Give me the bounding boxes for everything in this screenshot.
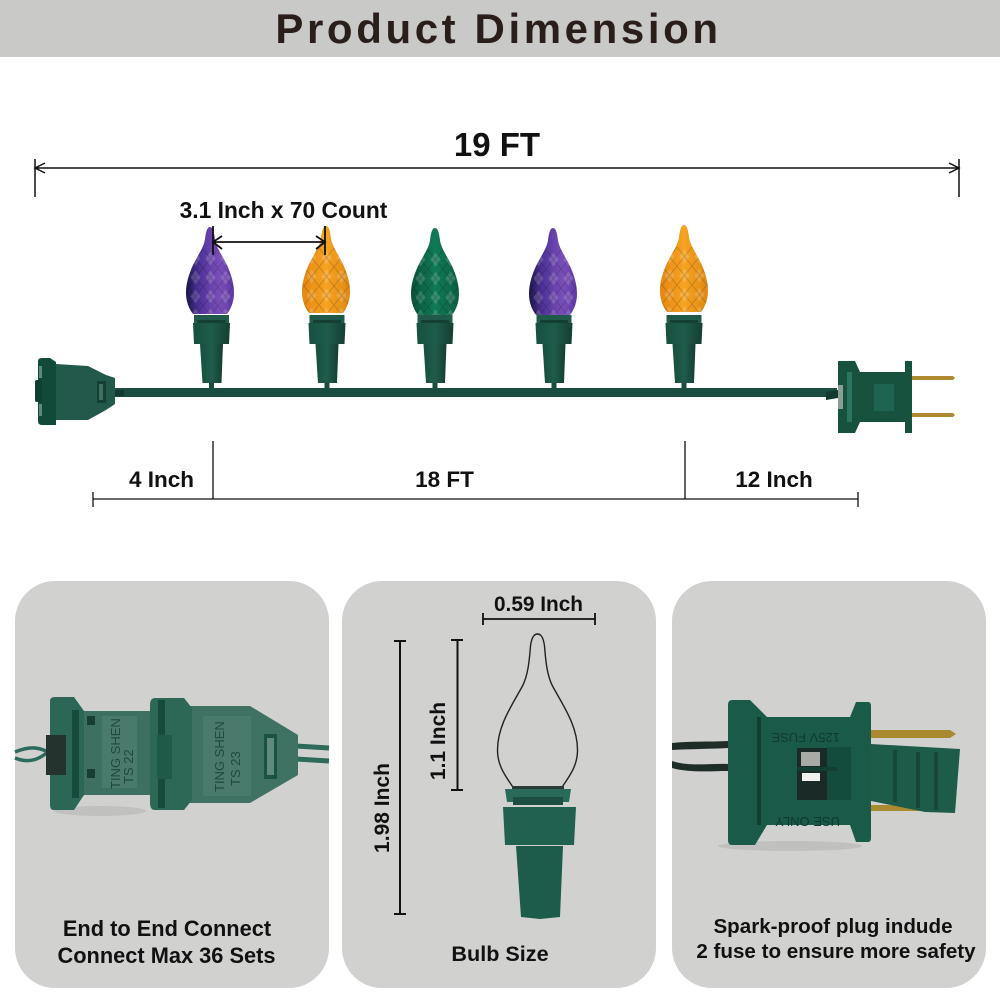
plug with fuses: 125V FUSE [771, 730, 840, 745]
total length dimension: 19 FT [35, 126, 959, 197]
caption: Bulb Size [451, 941, 549, 966]
bulb: purple 2 [528, 228, 578, 390]
connector body: TS 22 [121, 749, 136, 784]
light string [35, 225, 955, 433]
female end connector [35, 358, 124, 425]
section dimensions: 4 Inch, 18 FT, 12 Inch [93, 441, 858, 507]
connector body: TING SHEN [212, 721, 227, 792]
bulb: orange 1 [301, 226, 351, 390]
bulb: green [410, 228, 460, 390]
height dimension 1.98 Inch [371, 641, 406, 914]
height dimension 1.98 Inch: 1.98 Inch [371, 763, 394, 853]
panel: spark-proof plug [672, 581, 986, 988]
height dimension 1.1 Inch: 1.1 Inch [427, 702, 450, 780]
caption: 2 fuse to ensure more safety [696, 940, 976, 963]
caption [57, 916, 276, 968]
connector body [46, 697, 298, 816]
connector body: TS 23 [228, 751, 243, 786]
plug with fuses: USE ONLY [775, 814, 840, 829]
lower dimension: bulb spacing arrow [213, 226, 325, 255]
bulb spacing label: 3.1 Inch x 70 Count [180, 197, 388, 223]
caption: Spark-proof plug indude [713, 915, 953, 938]
bulb outline [498, 634, 578, 788]
bulb socket [503, 786, 576, 919]
wire [112, 388, 837, 397]
caption [696, 915, 976, 963]
bulb: orange 2 [659, 225, 709, 390]
male plug with prongs [826, 361, 955, 433]
section dimensions: 4 Inch, 18 FT, 12 Inch: 4 Inch [129, 467, 194, 492]
section dimensions: 4 Inch, 18 FT, 12 Inch: 12 Inch [735, 467, 813, 492]
wires [15, 746, 329, 761]
panel: bulb size [342, 581, 656, 988]
connector body: TING SHEN [108, 718, 123, 789]
caption: Connect Max 36 Sets [57, 943, 276, 968]
height dimension 1.1 Inch [427, 640, 463, 790]
title banner [0, 0, 1000, 57]
width dimension 0.59 Inch: 0.59 Inch [494, 593, 583, 616]
width dimension 0.59 Inch [483, 593, 595, 625]
section dimensions: 4 Inch, 18 FT, 12 Inch: 18 FT [415, 467, 474, 492]
caption: End to End Connect [63, 916, 271, 941]
panel: end connector [15, 581, 329, 988]
total length dimension: 19 FT: 19 FT [454, 126, 540, 163]
plug with fuses [672, 700, 960, 851]
bulb: purple 1 [185, 227, 235, 390]
title banner: Product Dimension [275, 5, 722, 52]
